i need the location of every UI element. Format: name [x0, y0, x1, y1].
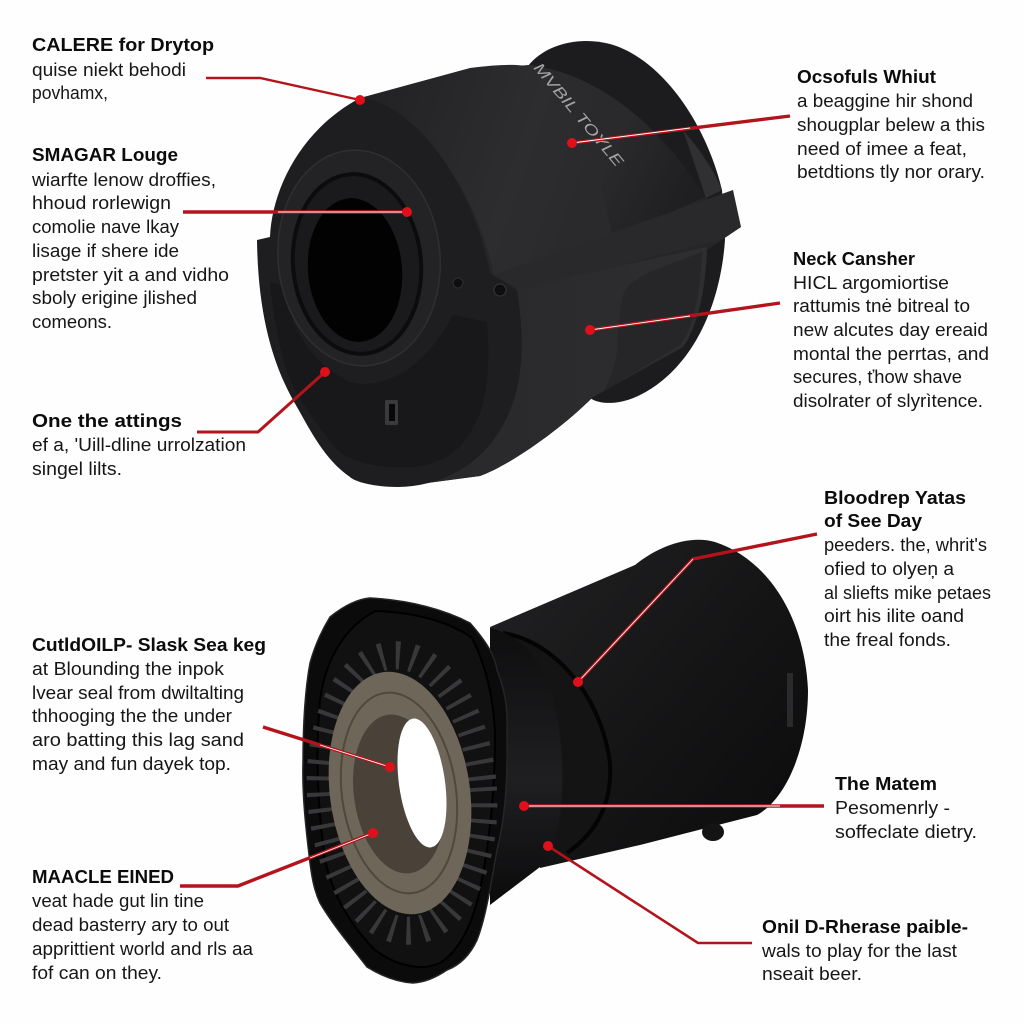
text block: One the attings: [32, 411, 246, 479]
text block: SMAGAR Louge: [31, 145, 229, 332]
text block: One the attings: One the attings: [32, 411, 182, 431]
text block: SMAGAR Louge: wiarfte lenow droffies,: [31, 170, 216, 190]
text block: Onil D-Rherase: Onil D-Rherase paible-: [762, 917, 968, 937]
text block: Bloodrep Yatas: of See Day: [824, 511, 922, 531]
text block: One the attings: singel lilts.: [32, 459, 122, 479]
text block: Bloodrep Yatas: al sliefts mike petaes: [824, 583, 991, 603]
through opening: [390, 715, 454, 851]
dot 4: [567, 138, 577, 148]
text block: Ocsofuls Whiut: shougplar belew a this: [797, 115, 985, 135]
text block: SMAGAR Louge: comeons.: [32, 312, 112, 332]
leader 5: [590, 303, 780, 330]
radiating fins: [312, 650, 492, 936]
leader 5 highlight: [590, 316, 690, 330]
lens mount outer ring: [269, 143, 449, 373]
dot 8: [543, 841, 553, 851]
upper shell: [360, 65, 612, 280]
neck band: [500, 65, 705, 262]
text block: Bloodrep Yatas: the freal fonds.: [824, 630, 951, 650]
callout dots: [320, 95, 595, 851]
collar ring: [503, 633, 610, 853]
text block: The Matem: [835, 774, 977, 842]
front flange: [303, 598, 507, 983]
leader 2: [183, 210, 407, 214]
leader 9 highlight: [320, 745, 390, 767]
text block: Onil D-Rherase: wals to play for the last: [761, 941, 957, 961]
rear slot: [787, 673, 793, 727]
text block: Neck Cansher: [793, 249, 989, 411]
text block: Neck Cansher: Neck Cansher: [793, 249, 915, 269]
text block: SMAGAR Louge: SMAGAR Louge: [32, 145, 178, 165]
leader 10 highlight: [310, 833, 373, 858]
text block: SMAGAR Louge: hhoud rorlewign: [32, 193, 171, 213]
collar band: [500, 633, 610, 867]
leader 3: [197, 372, 325, 432]
text block: One the attings: ef a, 'Uill-dline urrolzation: [32, 435, 246, 455]
product: lower horn assembly: [303, 540, 808, 983]
text block: CutldOILP: lvear seal from dwiltalting: [32, 683, 244, 703]
text block: MAACLE EINED: dead basterry ary to out: [32, 915, 229, 935]
text block: CALERE for Drytop: [32, 35, 214, 103]
lens aperture: [302, 194, 408, 346]
text block: The Matem: The Matem: [835, 774, 937, 794]
leader 10: [180, 833, 373, 886]
screw left: [453, 278, 463, 288]
dot 2: [402, 207, 412, 217]
text block: Bloodrep Yatas: [824, 488, 991, 650]
flange rim inner: [318, 611, 495, 967]
text block: CALERE for Drytop: CALERE for Drytop: [32, 35, 214, 55]
leader 8: [548, 846, 752, 943]
text block: SMAGAR Louge: comolie nave lkay: [32, 217, 179, 237]
text block: CutldOILP: aro batting this lag sand: [32, 730, 244, 750]
text block: CutldOILP: CutldOILP- Slask Sea keg: [32, 635, 266, 655]
text block: Neck Cansher: rattumis tnė bitreal to: [793, 296, 970, 316]
lower body: [397, 247, 707, 487]
product: upper housing: [257, 41, 741, 487]
mounting bump: [702, 823, 724, 841]
text block: Neck Cansher: secures, ťhow shave: [793, 367, 962, 387]
flange strap highlight: [683, 130, 722, 198]
leader 9: [263, 727, 390, 767]
front face: [257, 98, 522, 487]
text block: The Matem: soffeclate dietry.: [835, 822, 977, 842]
body silhouette: [360, 65, 741, 487]
dot 6: [573, 677, 583, 687]
text block: CutldOILP: may and fun dayek top.: [32, 754, 231, 774]
lower side panel: [603, 252, 702, 392]
text block: Bloodrep Yatas: peeders. the, whrit's: [824, 535, 987, 555]
text block: CutldOILP: [32, 635, 266, 774]
leader 6 highlight: [578, 559, 693, 682]
lower recess: [270, 282, 488, 467]
rear cylinder: [490, 540, 808, 868]
text block: Neck Cansher: HICL argomiortise: [793, 273, 949, 293]
text block: MAACLE EINED: apprittient world and rls aa: [32, 939, 254, 959]
text block: SMAGAR Louge: lisage if shere ide: [32, 241, 179, 261]
leader 7 highlight: [524, 805, 780, 807]
dot 5: [585, 325, 595, 335]
dot 1: [355, 95, 365, 105]
text block: MAACLE EINED: [32, 867, 254, 983]
model lettering: MVBIL TOYLE: [530, 60, 627, 171]
text block: MAACLE EINED: fof can on they.: [32, 963, 162, 983]
text block: Onil D-Rherase: nseait beer.: [762, 964, 862, 984]
text block: MAACLE EINED: veat hade gut lin tine: [32, 891, 204, 911]
port opening: [389, 404, 395, 421]
leader 2 highlight: [278, 211, 407, 213]
text block: Neck Cansher: disolrater of slyrìtence.: [793, 391, 983, 411]
text block: CutldOILP: thhooging the the under: [32, 706, 232, 726]
text block: Ocsofuls Whiut: need of imee a feat,: [797, 139, 967, 159]
text block: The Matem: Pesomenrly -: [835, 798, 950, 818]
text block: SMAGAR Louge: sboly erigine jlished: [32, 288, 197, 308]
bracket ridge: [493, 190, 741, 290]
dot 9: [385, 762, 395, 772]
dot 7: [519, 801, 529, 811]
screw right: [494, 284, 506, 296]
flared neck: [490, 628, 562, 905]
dot 10: [368, 828, 378, 838]
gasket groove: [328, 685, 470, 901]
leader 4 highlight: [572, 128, 690, 143]
text block: SMAGAR Louge: pretster yit a and vidho: [32, 265, 229, 285]
gasket ring: [314, 662, 486, 924]
port slot: [385, 400, 398, 425]
text block: CALERE for Drytop: quise niekt behodi: [32, 60, 186, 80]
text block: MAACLE EINED: MAACLE EINED: [32, 867, 174, 887]
text block: Neck Cansher: new alcutes day ereaid: [793, 320, 988, 340]
leader 4: [572, 116, 790, 143]
leader 1: [206, 78, 360, 100]
text block: Ocsofuls Whiut: Ocsofuls Whiut: [797, 67, 936, 87]
leader 6: [578, 534, 817, 682]
text block: Bloodrep Yatas: Bloodrep Yatas: [824, 488, 966, 508]
dot 3: [320, 367, 330, 377]
rear flange: [528, 41, 725, 403]
text block: CutldOILP: at Blounding the inpok: [32, 659, 225, 679]
text block: Bloodrep Yatas: ofied to olyeņ a: [824, 559, 955, 579]
text block: Onil D-Rherase: [761, 917, 968, 984]
text block: CALERE for Drytop: povhamx,: [32, 83, 108, 103]
text block: Bloodrep Yatas: oirt his ilite oand: [824, 606, 964, 626]
lens mount inner ring: [285, 169, 429, 359]
text block: Ocsofuls Whiut: [797, 67, 985, 182]
inner bore: [343, 709, 455, 879]
callout leader lines: [180, 78, 824, 943]
text block: Neck Cansher: montal the perrtas, and: [793, 344, 989, 364]
leader 7: [524, 804, 824, 808]
text block: Ocsofuls Whiut: betdtions tly nor orary.: [797, 162, 985, 182]
text block: Ocsofuls Whiut: a beaggine hir shond: [797, 91, 973, 111]
